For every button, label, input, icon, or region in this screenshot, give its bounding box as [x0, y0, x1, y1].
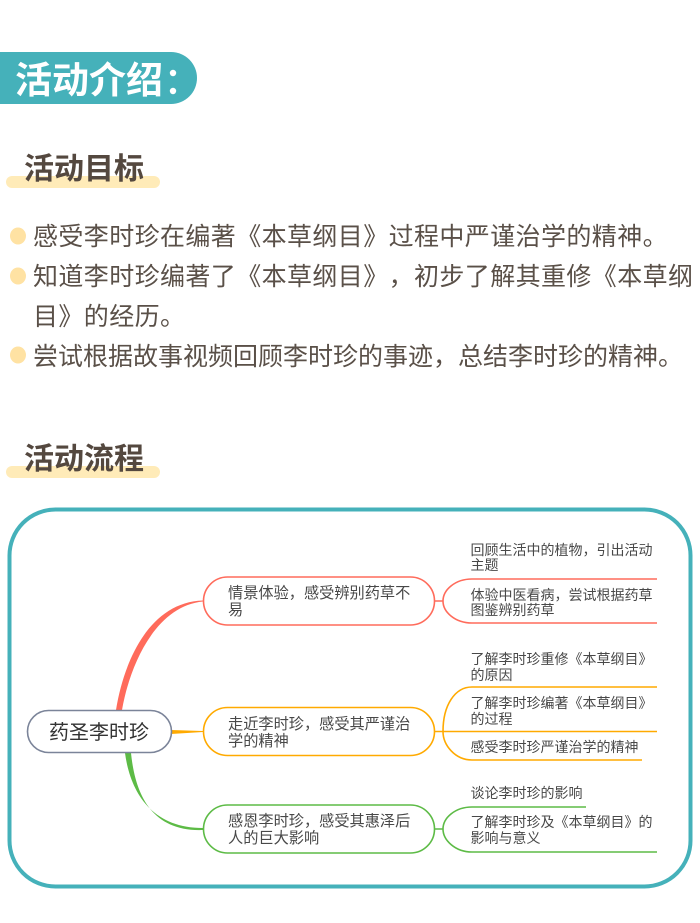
- panel: mind map: [10, 510, 690, 886]
- branch 2 sub-items: [434, 651, 657, 760]
- branch 1: scenario experience: [204, 577, 434, 625]
- goal 2: 目》的经历。: [33, 303, 185, 331]
- goal 2: 知道李时珍编著了《本草纲目》，初步了解其重修《本草纲: [33, 263, 693, 291]
- banner: activity introduction: [0, 52, 197, 104]
- central topic: 药圣李时珍: [49, 721, 149, 744]
- branch 3: gratitude: 感恩李时珍，感受其惠泽后: [228, 813, 410, 830]
- branch 1: scenario experience: 情景体验，感受辨别药草不: [228, 585, 410, 602]
- branch 3 sub-items: [434, 785, 657, 852]
- goal 3: 尝试根据故事视频回顾李时珍的事迹，总结李时珍的精神。: [33, 343, 683, 371]
- branch 1 sub-items: [434, 542, 657, 623]
- goal 1: 感受李时珍在编著《本草纲目》过程中严谨治学的精神。: [33, 223, 668, 251]
- branch 2: approaching Li Shizhen: 走近李时珍，感受其严谨治: [228, 716, 410, 733]
- branch 2 sub-items: 的过程: [470, 711, 512, 727]
- central topic: [28, 710, 172, 752]
- branch 2 sub-items: 了解李时珍编著《本草纲目》: [470, 695, 652, 711]
- connector: red branch: [116, 600, 203, 710]
- goals list: [10, 223, 693, 371]
- branch 1 sub-items: 图鉴辨别药草: [470, 602, 554, 618]
- connector: green branch: [125, 753, 203, 830]
- branch 2 sub-items: 了解李时珍重修《本草纲目》: [470, 651, 652, 667]
- branch 2: approaching Li Shizhen: 学的精神: [228, 733, 289, 750]
- branch 3 sub-items: 谈论李时珍的影响: [470, 785, 582, 801]
- banner: activity introduction: 活动介绍: [15, 60, 163, 101]
- connector: orange branch: [171, 730, 203, 734]
- heading: activity process: 活动流程: [24, 443, 144, 476]
- branch 1: scenario experience: 易: [228, 602, 243, 619]
- branch 3: gratitude: [204, 805, 434, 853]
- branch 1 sub-items: 主题: [470, 557, 498, 573]
- heading: activity goals: 活动目标: [24, 153, 144, 186]
- branch 3 sub-items: 了解李时珍及《本草纲目》的: [470, 814, 652, 830]
- branch 3: gratitude: 人的巨大影响: [228, 830, 319, 847]
- goal 2: [10, 263, 693, 331]
- branch 2 sub-items: 感受李时珍严谨治学的精神: [470, 739, 638, 755]
- branch 3 sub-items: 影响与意义: [470, 830, 540, 846]
- branch 1 sub-items: 回顾生活中的植物，引出活动: [470, 542, 652, 558]
- branch 2 sub-items: 的原因: [470, 667, 512, 683]
- branch 2: approaching Li Shizhen: [204, 708, 434, 756]
- branch 1 sub-items: 体验中医看病，尝试根据药草: [470, 587, 652, 603]
